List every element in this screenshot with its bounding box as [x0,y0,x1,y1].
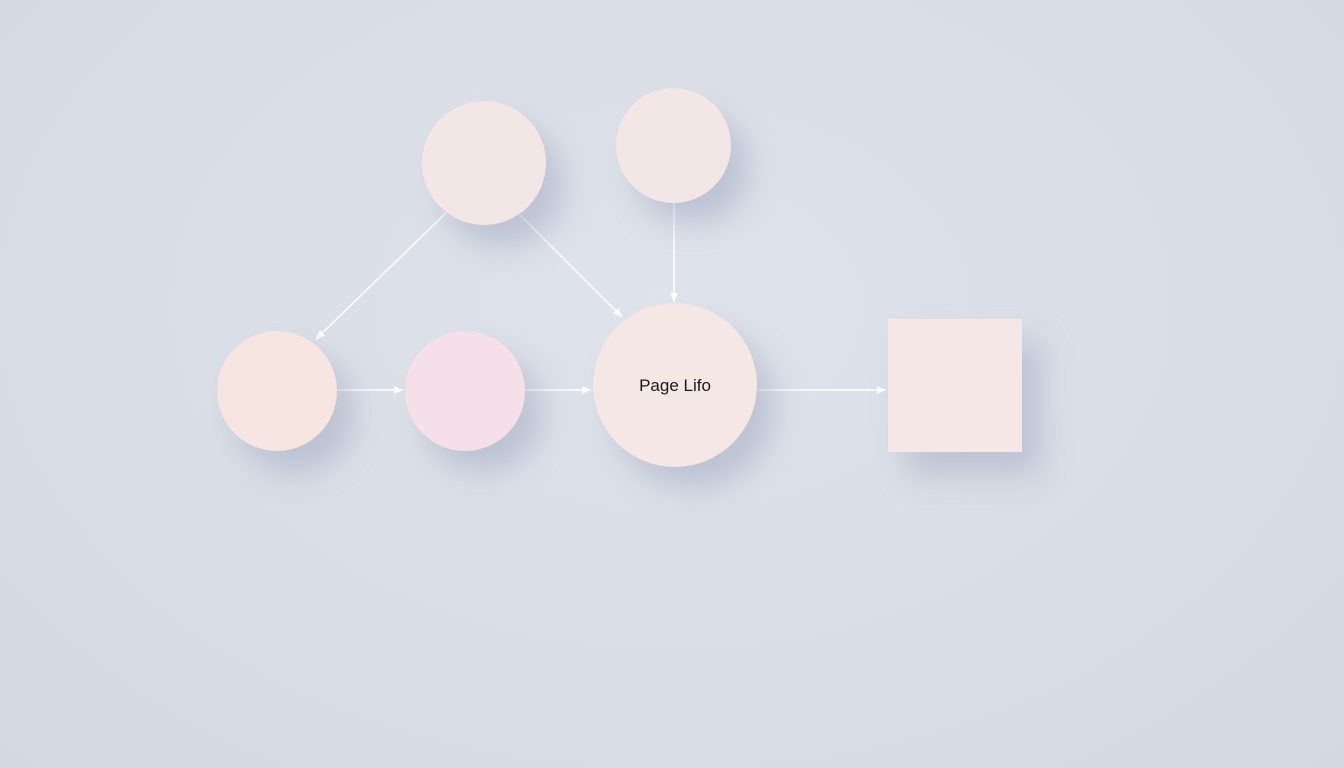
circle: center with label [593,303,757,467]
circle: middle pink [405,331,525,451]
arrow: left to middle [338,389,403,391]
square [888,319,1022,452]
circle: top-right [616,88,731,203]
arrow: middle to center [525,389,591,391]
arrow: center to square [758,389,886,391]
label: Page Lifo: Page Lifo [639,376,711,395]
arrow: top-left circle to left circle [316,213,446,339]
circle: left [217,331,337,451]
arrow: top-left circle to center circle [519,214,622,317]
circle: top-left [422,101,546,225]
arrow: top-right circle to center circle [673,202,675,302]
